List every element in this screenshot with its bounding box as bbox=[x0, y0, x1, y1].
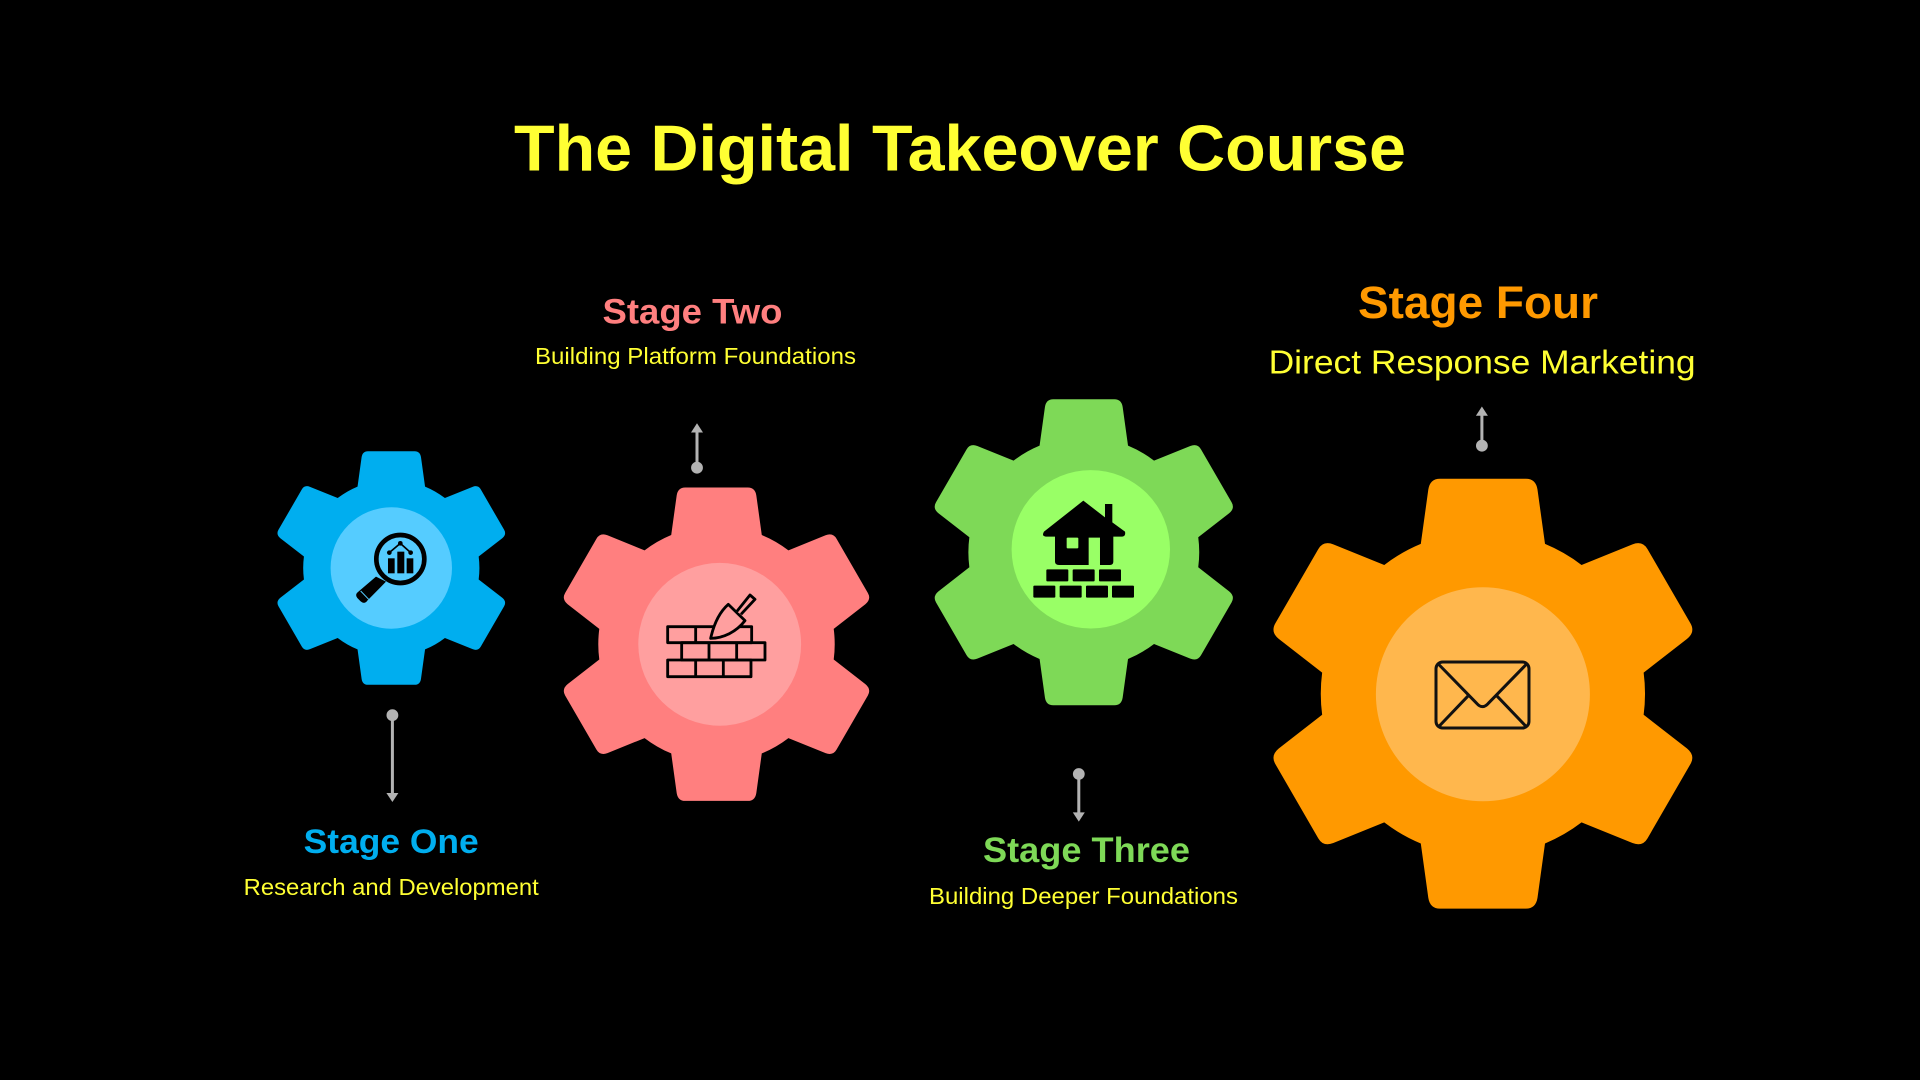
icon: magnifier with chart bbox=[356, 535, 424, 603]
gear: stage three bbox=[935, 399, 1233, 705]
heading: stage one: Stage One bbox=[304, 823, 479, 861]
gear: stage two bbox=[564, 488, 869, 801]
text: stage four description: Direct Response Marketing bbox=[1269, 344, 1696, 380]
gear hub: stage one bbox=[331, 507, 452, 629]
arrow: stage one bbox=[386, 709, 398, 802]
gear: stage one bbox=[277, 451, 505, 685]
arrow: stage two bbox=[691, 423, 703, 474]
panel: stage one bbox=[244, 451, 539, 900]
icon: envelope bbox=[1436, 662, 1529, 728]
arrow: stage four bbox=[1476, 406, 1488, 452]
text: stage three description: Building Deeper Foundations bbox=[929, 883, 1238, 909]
title: The Digital Takeover Course bbox=[514, 112, 1406, 184]
gear hub: stage two bbox=[638, 563, 801, 726]
icon: brick wall and trowel bbox=[668, 595, 765, 677]
text: stage one description: Research and Development bbox=[244, 874, 539, 900]
heading: stage two: Stage Two bbox=[602, 292, 782, 332]
gear: stage four bbox=[1273, 479, 1692, 909]
arrow: stage three bbox=[1073, 768, 1085, 822]
panel: stage three bbox=[929, 399, 1238, 909]
heading: stage four: Stage Four bbox=[1358, 277, 1598, 328]
heading: stage three: Stage Three bbox=[983, 831, 1190, 870]
gear hub: stage three bbox=[1012, 470, 1170, 628]
gear hub: stage four bbox=[1376, 587, 1590, 801]
text: stage two description: Building Platform Foundations bbox=[535, 343, 856, 369]
icon: house on bricks bbox=[1033, 501, 1134, 598]
panel: stage two bbox=[535, 292, 869, 801]
panel: stage four bbox=[1269, 277, 1696, 909]
